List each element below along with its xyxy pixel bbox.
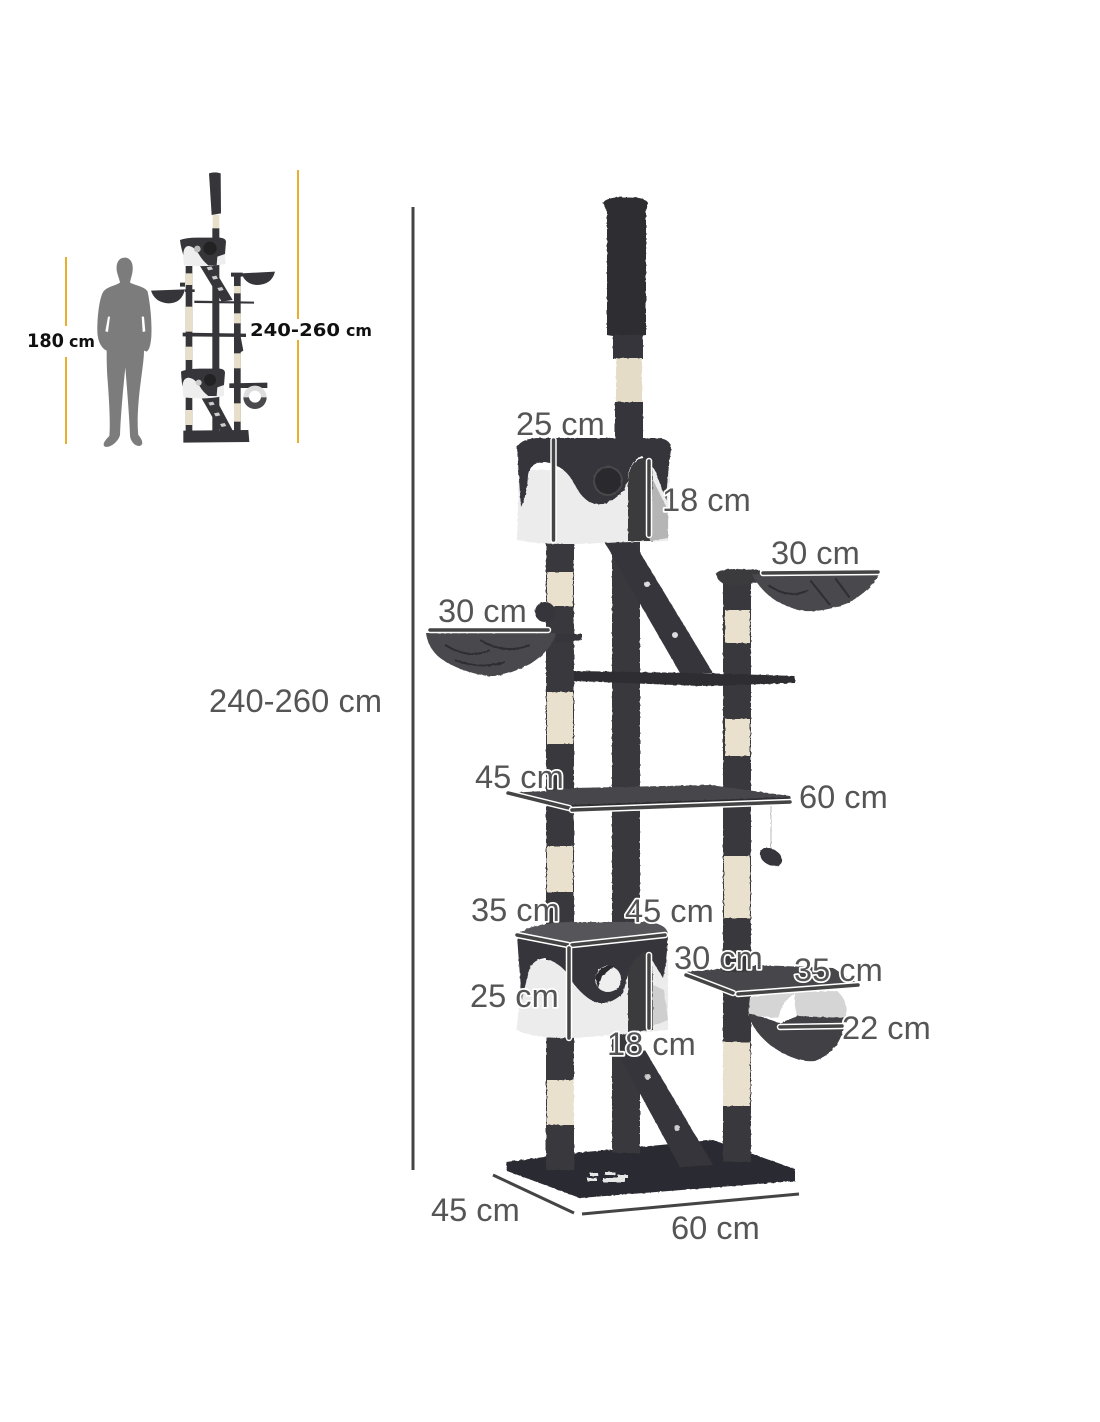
label: upper house opening: 18 cm [662,481,751,518]
label: lower house depth: 35 cm [471,891,560,928]
label: lower house width: 45 cm [625,892,714,929]
dimension line: small shelf width [738,985,858,994]
miniature cat tree [151,172,275,443]
lower ladder [620,1050,713,1167]
left post with sisal wraps [546,540,574,1170]
right hammock [752,572,880,611]
left hammock [426,602,582,676]
human height label [27,330,95,352]
dimension line: lower house opening [646,955,652,1028]
label: lower house height: 25 cm [470,977,559,1014]
dimension line: lower house width [572,935,665,945]
dimension line: left hammock [430,627,548,633]
thin shelf [574,671,795,686]
human height label: cm [69,332,95,351]
size comparison inset [27,170,372,447]
hanging mouse toy [757,806,785,870]
base board with paw print [506,1140,795,1198]
small tree height label: 240-260 [250,320,340,341]
label: right hammock: 30 cm [771,534,860,571]
human height label: 180 [27,330,64,352]
dimension line: big shelf width [572,802,790,810]
label: tube diameter: 22 cm [842,1009,931,1046]
dimension line: base depth [493,1175,574,1213]
upper ladder [605,541,713,673]
small tree height label [250,320,372,341]
dimension line: upper house height [550,440,557,540]
lower house [517,922,668,1038]
dimension line: base width [582,1194,799,1214]
yellow height line: 180 cm [65,257,67,444]
large middle shelf [507,785,790,811]
label: big shelf depth: 45 cm [475,758,564,795]
dimension line: tube diameter [780,1026,842,1027]
dimension line: lower house depth [517,935,568,945]
top ceiling post [603,197,648,442]
label: left hammock: 30 cm [438,592,527,629]
centre post [612,540,640,1153]
dimension line: small shelf depth [686,975,733,993]
yellow height line: 240-260 cm [297,170,299,443]
tube [748,991,846,1061]
dimension line: right hammock [763,572,878,573]
label: upper house height: 25 cm [516,405,605,442]
dimension line: lower house height [566,948,572,1038]
small tree height label: cm [346,321,372,340]
overall height label: 240-260 cm [209,682,382,719]
human silhouette [97,258,152,447]
label: small shelf depth: 30 cm [674,939,763,976]
label: lower house opening: 18 cm [607,1025,696,1062]
dimension labels [431,405,931,1246]
label: base depth: 45 cm [431,1191,520,1228]
right post with sisal wraps [716,569,760,1162]
upper house [517,438,671,544]
label: small shelf width: 35 cm [794,951,883,988]
overall height line [412,207,414,1170]
dimension line: big shelf depth [508,793,569,808]
main cat tree photo illustration [426,197,880,1198]
label: big shelf width: 60 cm [799,778,888,815]
dimension line: upper house opening [646,461,652,535]
small shelf [685,958,860,995]
label: base width: 60 cm [671,1209,760,1246]
